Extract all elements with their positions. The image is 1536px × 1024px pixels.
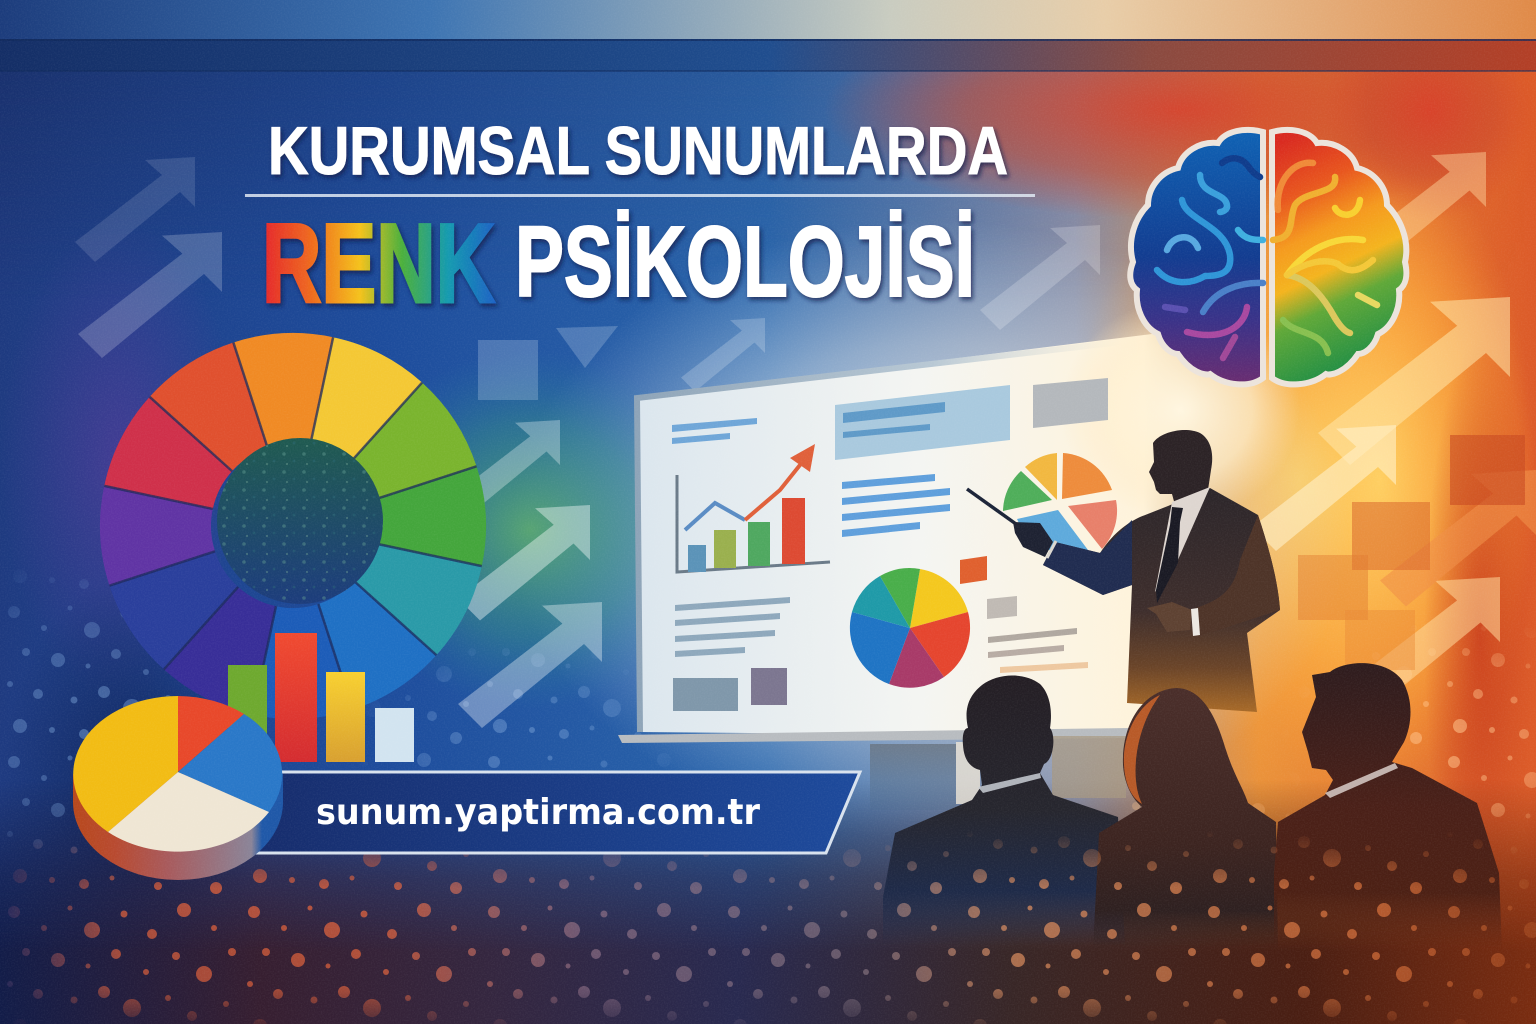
screen text lines: middle — [842, 474, 950, 537]
dotted texture: blue and orange — [0, 540, 1536, 890]
screen header lines — [843, 402, 945, 438]
pointer — [967, 489, 1016, 524]
sleeve: pointing arm — [1043, 520, 1132, 595]
bar chart: foreground — [228, 633, 414, 762]
audience member: right — [1274, 663, 1502, 950]
upper pie on screen — [1003, 453, 1117, 553]
sleeve: lower arm — [1196, 515, 1280, 636]
background blocks — [478, 326, 1525, 670]
cuff: resting — [1191, 608, 1200, 636]
title divider — [245, 194, 1035, 197]
screen text lines: top left — [672, 418, 757, 444]
3d pie chart — [73, 696, 283, 880]
screen text lines: lower right — [988, 628, 1088, 673]
title word: renk: RENK — [262, 201, 495, 326]
wheel separators — [104, 337, 482, 715]
hand: pointing — [1013, 522, 1053, 557]
screen ledge — [618, 728, 1130, 743]
url text: sunum.yaptirma.com.tr — [316, 792, 760, 833]
line and bar chart — [677, 444, 830, 572]
presenter silhouette — [967, 430, 1280, 712]
shirt and tie — [1155, 487, 1210, 603]
url banner — [250, 772, 860, 853]
brain icon — [1130, 130, 1406, 384]
screen grey block — [1033, 378, 1108, 428]
title — [245, 113, 1035, 326]
screen text lines: lower left — [675, 597, 790, 657]
audience member: center — [1093, 688, 1278, 950]
body — [1043, 488, 1280, 712]
screen header block — [835, 385, 1010, 460]
background arrows — [75, 152, 1536, 728]
top band — [0, 0, 1536, 72]
wall under screen — [870, 736, 1126, 810]
brain: left hemisphere — [1130, 130, 1263, 384]
foreground dots — [0, 830, 1536, 1024]
title word: psikolojisi: PSİKOLOJİSİ — [515, 206, 975, 318]
wheel center — [217, 438, 383, 604]
head — [1149, 430, 1212, 505]
small squares — [960, 556, 1017, 619]
title line 1: KURUMSAL SUNUMLARDA — [268, 113, 1008, 189]
cuff: pointing — [1047, 541, 1056, 558]
color wheel — [89, 322, 497, 730]
hand: resting — [1147, 602, 1192, 632]
audience member: left — [883, 675, 1125, 945]
screen lower blocks — [673, 668, 787, 711]
lower pie on screen — [850, 568, 970, 688]
presentation screen — [618, 300, 1300, 810]
brain: right hemisphere — [1272, 130, 1406, 384]
audience — [883, 663, 1502, 950]
